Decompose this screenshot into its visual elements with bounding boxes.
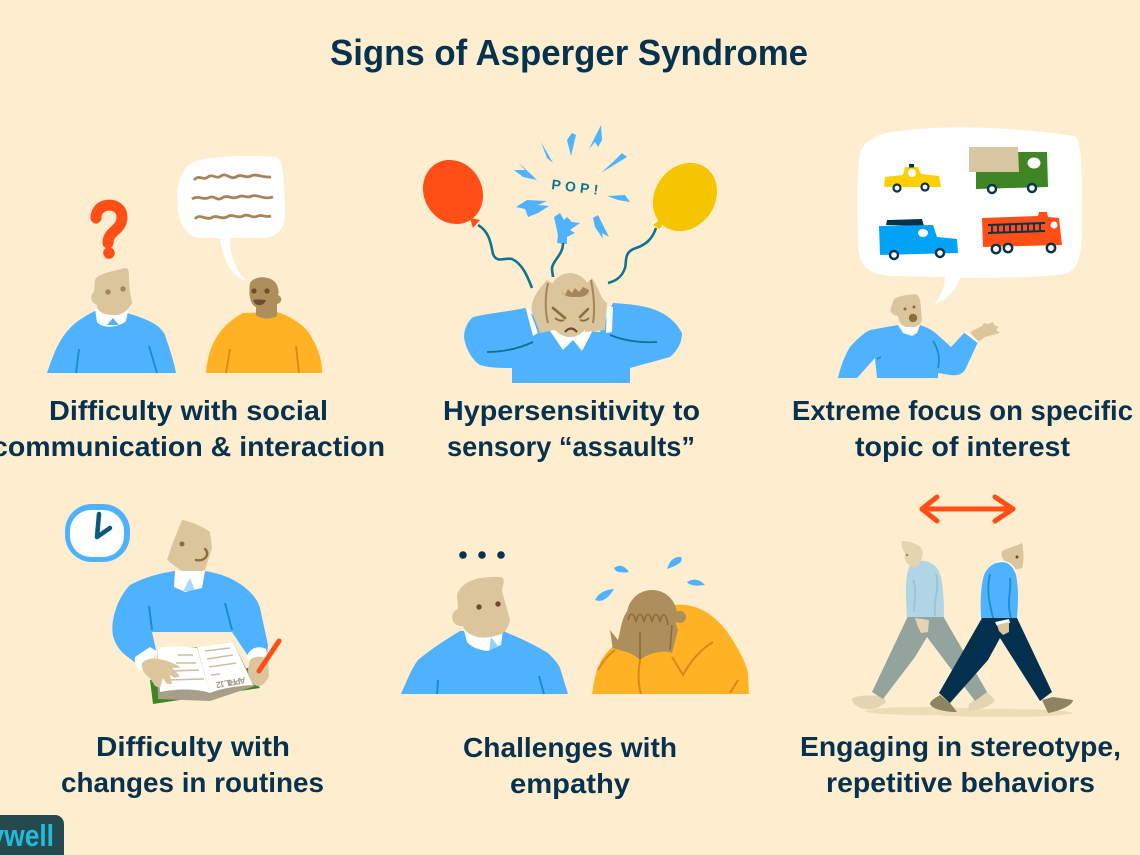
- label: Difficulty with: [96, 731, 290, 762]
- person reading calendar: APRIL 12: [215, 675, 246, 690]
- label: communication & interaction: [0, 431, 385, 462]
- person in blue sweater: [401, 577, 568, 694]
- icon: clock: [65, 504, 130, 562]
- person covering ears: [464, 273, 682, 383]
- panel: hypersensitivity: [411, 125, 730, 462]
- icon: blue van: [879, 219, 958, 259]
- icon: fire truck: [982, 212, 1062, 253]
- icon: three dots: [459, 551, 505, 559]
- label: changes in routines: [61, 767, 324, 798]
- speech bubble: [857, 127, 1082, 305]
- label: [61, 731, 324, 798]
- label: sensory “assaults”: [447, 431, 695, 462]
- speech bubble with squiggles: [177, 156, 285, 281]
- faded walking figure: [852, 541, 995, 711]
- label: Challenges with: [463, 732, 677, 763]
- person reading calendar: [112, 520, 279, 704]
- label: repetitive behaviors: [826, 767, 1095, 798]
- icon: burst: [514, 125, 630, 244]
- panel: empathy: [401, 551, 749, 799]
- title: Signs of Asperger Syndrome: [330, 32, 808, 73]
- icon: double arrow: [922, 497, 1013, 521]
- person crying with face in hands: [592, 590, 749, 694]
- label: [800, 731, 1121, 798]
- label: [0, 395, 385, 462]
- ground shadow: [865, 707, 1072, 717]
- icon: sweat drops: [595, 557, 705, 601]
- panel: social communication: [0, 156, 385, 462]
- icon: red balloon: [411, 149, 532, 288]
- solid walking figure: [930, 543, 1073, 713]
- panel: extreme focus: [792, 127, 1133, 462]
- icon: taxi: [884, 164, 941, 192]
- label: Engaging in stereotype,: [800, 731, 1121, 762]
- label: [792, 395, 1133, 462]
- label: [443, 395, 700, 462]
- label: [463, 732, 677, 799]
- string under burst: [552, 243, 563, 277]
- person in orange sweater: [206, 277, 322, 373]
- panel: repetitive behaviors: [800, 497, 1121, 798]
- label: Difficulty with social: [49, 395, 328, 426]
- label: topic of interest: [855, 431, 1070, 462]
- icon: question mark: [96, 205, 122, 259]
- label: Extreme focus on specific: [792, 395, 1133, 426]
- label: empathy: [510, 768, 630, 799]
- pop text: POP!: [551, 176, 599, 198]
- icon: yellow balloon: [608, 150, 730, 283]
- panel: changes in routines: [61, 504, 324, 798]
- person in blue sweater: [47, 268, 176, 373]
- icon: green truck: [969, 147, 1048, 193]
- label: Hypersensitivity to: [443, 395, 700, 426]
- person talking: [838, 294, 1000, 378]
